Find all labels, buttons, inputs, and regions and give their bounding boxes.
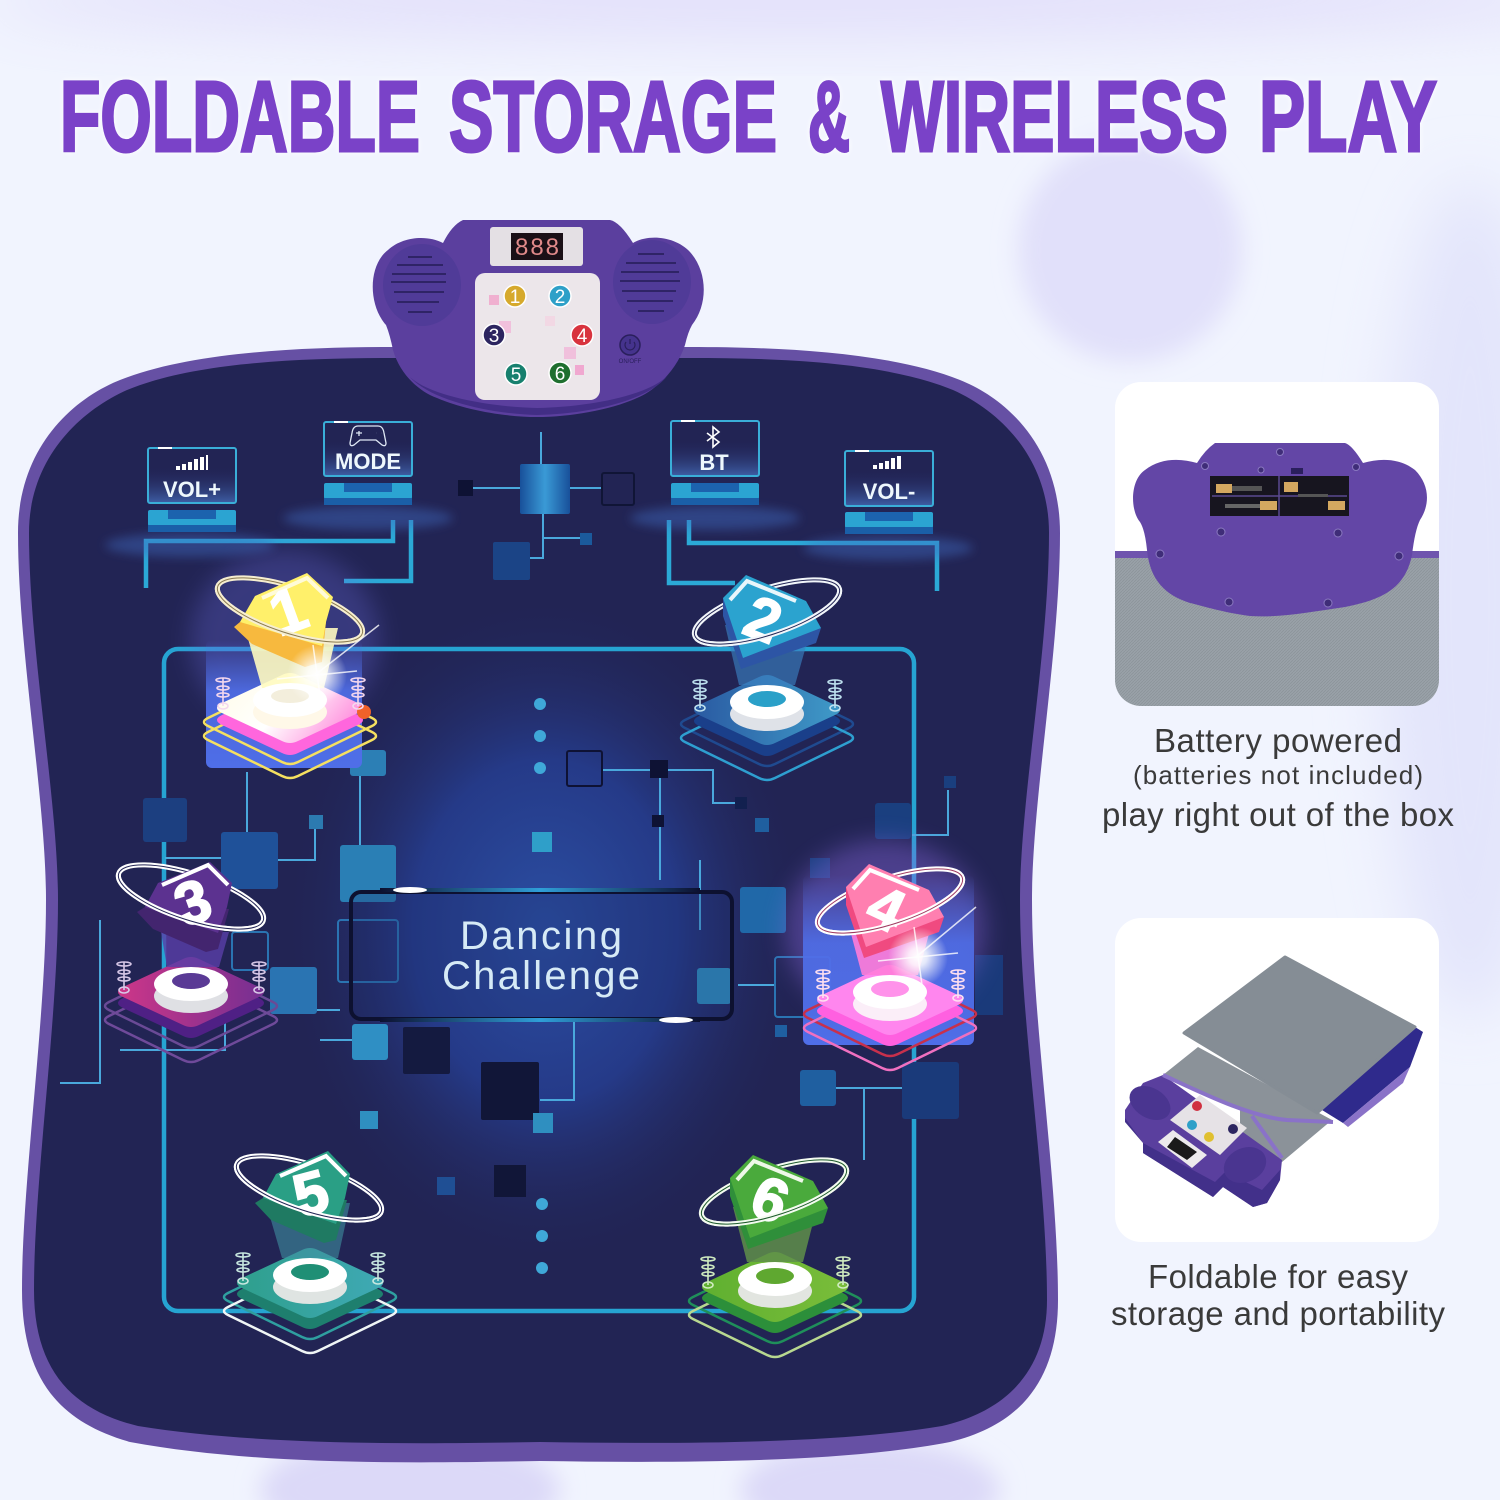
station 1: yellow — [190, 550, 380, 778]
controller console — [373, 220, 704, 417]
caption: battery: Battery powered — [1154, 722, 1402, 759]
battery compartment — [1210, 476, 1349, 516]
station 1: yellow: 1 — [260, 573, 316, 650]
station 6: green — [689, 1147, 861, 1357]
speaker right — [613, 240, 691, 324]
speaker left — [383, 244, 461, 326]
station 3: purple — [105, 852, 277, 1062]
power button: ON/OFF — [619, 359, 642, 365]
caption: battery: (batteries not included) — [1133, 760, 1423, 790]
button panel: 3 — [489, 326, 499, 347]
button panel: 4 — [577, 326, 588, 347]
station 4: pink: 4 — [857, 871, 916, 946]
sparkle — [277, 625, 379, 705]
caption: foldable: storage and portability — [1111, 1295, 1446, 1332]
dancing challenge panel: Dancing — [460, 914, 622, 958]
title: FOLDABLE — [60, 61, 420, 173]
monitor: bluetooth — [630, 420, 800, 530]
card: battery photo — [1115, 382, 1439, 708]
dance mat — [18, 347, 1060, 1462]
station 4: pink — [785, 840, 985, 1070]
fabric flap — [1163, 1047, 1332, 1120]
title: WIRELESS — [881, 61, 1228, 173]
button panel: 2 — [555, 287, 565, 308]
monitor: volume up: VOL+ — [163, 477, 221, 502]
station 5: teal: 5 — [286, 1157, 336, 1230]
station 2: blue: 2 — [735, 582, 791, 657]
monitor: bluetooth: BT — [699, 450, 729, 475]
button panel: 1 — [510, 287, 520, 308]
caption: battery — [1102, 722, 1454, 833]
monitor: volume down — [803, 450, 973, 560]
folded console — [1123, 1075, 1282, 1207]
icon: gamepad — [350, 426, 386, 446]
sparkle — [878, 907, 976, 987]
led display: 888 — [515, 234, 559, 261]
monitor: volume down: VOL- — [863, 479, 915, 504]
led display — [490, 227, 583, 266]
dancing challenge panel: Challenge — [442, 954, 640, 998]
station 2: blue — [681, 567, 853, 780]
caption: battery: play right out of the box — [1102, 796, 1454, 833]
caption: foldable — [1111, 1258, 1446, 1332]
button panel — [475, 273, 600, 400]
monitor: volume up — [105, 447, 275, 557]
station 5: teal — [224, 1143, 396, 1353]
power button — [619, 335, 642, 365]
dancing challenge panel — [351, 887, 732, 1023]
monitor: mode — [283, 421, 453, 530]
title: & — [808, 61, 850, 173]
card: folded mat photo — [1115, 918, 1439, 1242]
button panel: 6 — [555, 364, 565, 385]
circuit board lines and squares — [60, 432, 1003, 1311]
button panel: 5 — [511, 365, 521, 386]
station 6: green: 6 — [742, 1162, 798, 1237]
icon: bluetooth — [707, 427, 719, 447]
monitor: mode: MODE — [335, 449, 401, 474]
station 3: purple: 3 — [166, 865, 220, 940]
title — [60, 61, 1437, 173]
caption: foldable: Foldable for easy — [1148, 1258, 1408, 1295]
title: STORAGE — [449, 61, 777, 173]
